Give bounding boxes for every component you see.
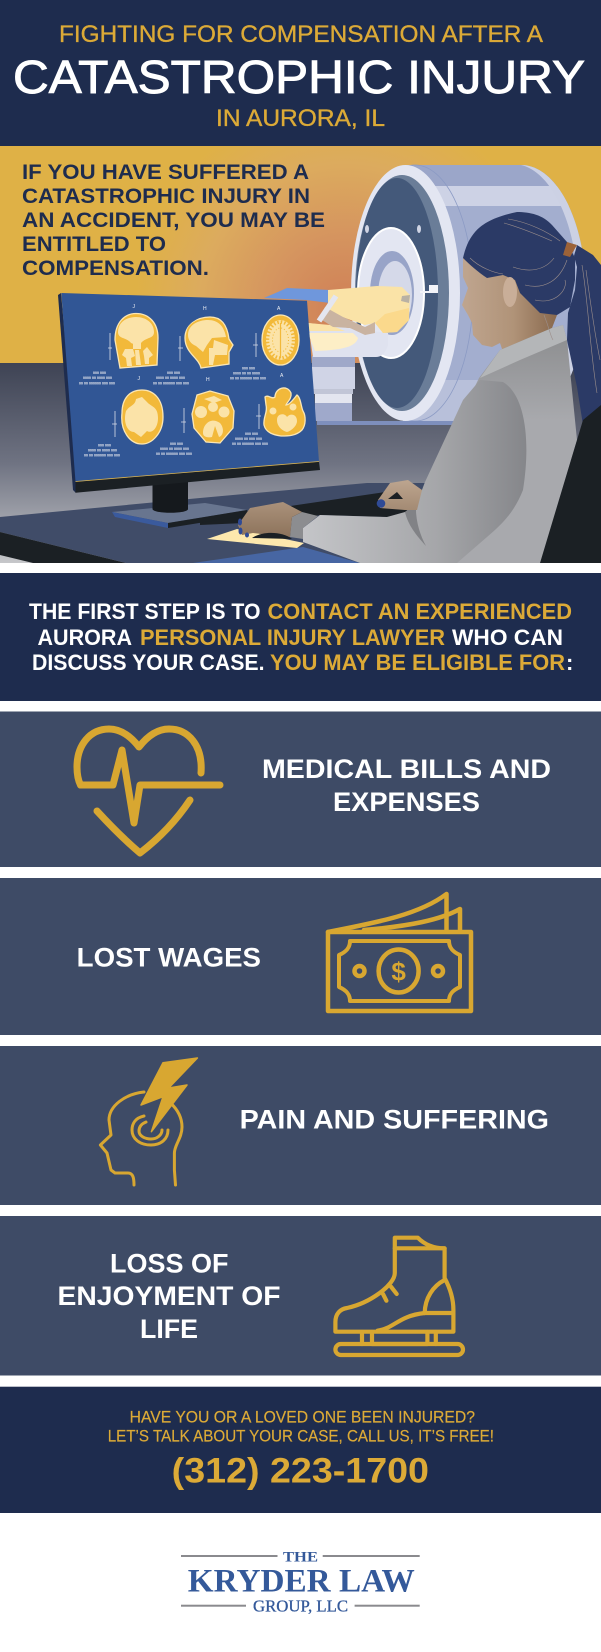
- elbow fold: [405, 510, 426, 546]
- scan letters and caption lines: 00 00 000000 000 000: [230, 376, 266, 380]
- ponytail: [567, 245, 601, 425]
- icon: head with lightning bolt: [100, 1058, 197, 1185]
- scanner table: [308, 323, 388, 421]
- floor and back wall gradient: [0, 363, 601, 563]
- label: loss of enjoyment of life: LIFE: [140, 1314, 198, 1344]
- lab coat body: [457, 325, 577, 563]
- MRI machine: [317, 165, 590, 425]
- scan letters and caption lines: 0000 00 0000 000: [88, 448, 117, 452]
- title line: catastrophic injury: CATASTROPHIC INJURY: [13, 51, 585, 103]
- logo: The Kryder Law Group: KRYDER LAW: [188, 1564, 415, 1600]
- scan letters and caption lines: 00 00 000000 000 000: [232, 442, 268, 446]
- first step text: AURORA: [38, 625, 132, 650]
- icon: banknotes: [328, 894, 471, 1011]
- first step text: CONTACT AN EXPERIENCED: [268, 599, 572, 624]
- hair: [463, 212, 575, 315]
- scan letters and caption lines: 000 000: [242, 366, 255, 370]
- icon: banknotes: $: [391, 956, 406, 986]
- panel: first step: [0, 573, 601, 701]
- first step text: PERSONAL INJURY LAWYER: [140, 625, 445, 650]
- first step text: DISCUSS YOUR CASE.: [32, 650, 264, 675]
- icon: ice skate: [335, 1238, 463, 1355]
- panel: call to action: [0, 1387, 601, 1513]
- first step text: [29, 599, 573, 675]
- scan: coronal section: [115, 314, 158, 368]
- ear: [503, 277, 517, 307]
- scan letters and caption lines: 00 00 000000 000 000: [153, 382, 189, 386]
- title line: location: IN AURORA, IL: [216, 105, 385, 132]
- call to action text: HAVE YOU OR A LOVED ONE BEEN INJURED?: [130, 1408, 475, 1427]
- scan letters and caption lines: J: [132, 304, 136, 310]
- panel: loss of enjoyment: [0, 1216, 601, 1376]
- scan: axial section: [262, 315, 299, 365]
- scan: lower skull section: [264, 388, 305, 436]
- header panel: [0, 0, 601, 146]
- panel: pain and suffering: [0, 1046, 601, 1205]
- label: pain and suffering: PAIN AND SUFFERING: [240, 1105, 549, 1135]
- panel: lost wages: [0, 878, 601, 1035]
- label: lost wages: LOST WAGES: [77, 943, 261, 973]
- label: loss of enjoyment of life: [58, 1249, 280, 1344]
- scan letters and caption lines: 000 000: [245, 432, 258, 436]
- patient: [264, 286, 410, 335]
- scan letters and caption lines: 0000 00 00 0000: [233, 372, 260, 376]
- collar: [480, 325, 567, 378]
- intro statement: CATASTROPHIC INJURY IN: [22, 184, 310, 208]
- illustration panel: MRI scan room: [0, 146, 601, 563]
- intro statement: ENTITLED TO: [22, 232, 166, 256]
- icon: heart with pulse: [77, 729, 220, 853]
- scan: sagittal section: [185, 317, 233, 368]
- label: medical bills: EXPENSES: [333, 787, 480, 817]
- label: medical bills: MEDICAL BILLS AND: [262, 754, 551, 784]
- hair strands: [470, 219, 600, 393]
- scan letters and caption lines: H: [206, 377, 210, 383]
- intro statement: [22, 160, 325, 280]
- phone number: (312) 223-1700: [172, 1452, 429, 1491]
- sleeve cuff: [290, 512, 318, 539]
- lab coat arm: [303, 380, 526, 563]
- scan letters and caption lines: 000 000: [93, 371, 106, 375]
- scan letters and caption lines: 0000 00 0000 000: [156, 376, 185, 380]
- logo: The Kryder Law Group: [181, 1550, 420, 1616]
- scan: lower axial section: [122, 390, 163, 444]
- panel: medical bills: [0, 712, 601, 867]
- hand on mouse: [238, 502, 302, 537]
- label: loss of enjoyment of life: LOSS OF: [110, 1249, 228, 1279]
- first step text: YOU MAY BE ELIGIBLE FOR: [270, 650, 565, 675]
- first step text: WHO CAN: [452, 625, 563, 650]
- first step text: THE FIRST STEP IS TO: [29, 599, 260, 624]
- label: medical bills: [262, 754, 551, 817]
- first step text: :: [566, 650, 573, 675]
- intro statement: AN ACCIDENT, YOU MAY BE: [22, 208, 325, 232]
- scan letters and caption lines: 00 00 000000 000 000: [156, 452, 192, 456]
- hair tie: [563, 242, 577, 257]
- face and neck: [462, 258, 557, 352]
- scan letters and caption lines: 0000 00 0000 000: [160, 447, 189, 451]
- hand on keyboard: [378, 480, 422, 510]
- label: loss of enjoyment of life: ENJOYMENT OF: [58, 1281, 280, 1311]
- scan letters and caption lines: J: [138, 376, 140, 382]
- technician: [238, 212, 601, 563]
- wall with orange glow: [0, 146, 601, 364]
- scan letters and caption lines: 0000 00 000 000: [235, 437, 262, 441]
- call to action second line: LET’S TALK ABOUT YOUR CASE, CALL US, IT’S FREE!: [108, 1426, 494, 1445]
- scan letters and caption lines: A: [280, 373, 284, 379]
- logo: The Kryder Law Group: THE: [283, 1550, 318, 1566]
- logo: The Kryder Law Group: GROUP, LLC: [253, 1597, 348, 1616]
- scan letters and caption lines: [79, 304, 284, 458]
- monitor stand: [112, 478, 249, 528]
- scan letters and caption lines: A: [277, 306, 281, 312]
- scan letters and caption lines: 000 000: [170, 442, 183, 446]
- scan letters and caption lines: 000 000: [98, 444, 111, 448]
- desk: [0, 483, 430, 563]
- scan letters and caption lines: 00 00 000000 000 000: [84, 454, 120, 458]
- scan letters and caption lines: H: [203, 306, 207, 312]
- paper on desk: [207, 529, 304, 548]
- mouse: [252, 533, 292, 539]
- title line: fighting for compensation: FIGHTING FOR COMPENSATION AFTER A: [59, 21, 543, 48]
- monitor with brain scans: [58, 293, 320, 493]
- fingernails: [238, 499, 385, 538]
- scan: brain stem section: [192, 391, 234, 443]
- intro statement: COMPENSATION.: [22, 256, 209, 280]
- intro statement: IF YOU HAVE SUFFERED A: [22, 160, 309, 184]
- chair: [540, 405, 601, 563]
- scan letters and caption lines: 00 00 000000 000 000: [79, 382, 115, 386]
- scan letters and caption lines: 000 000: [167, 371, 180, 375]
- scan letters and caption lines: 0000 00 0000 000: [83, 376, 112, 380]
